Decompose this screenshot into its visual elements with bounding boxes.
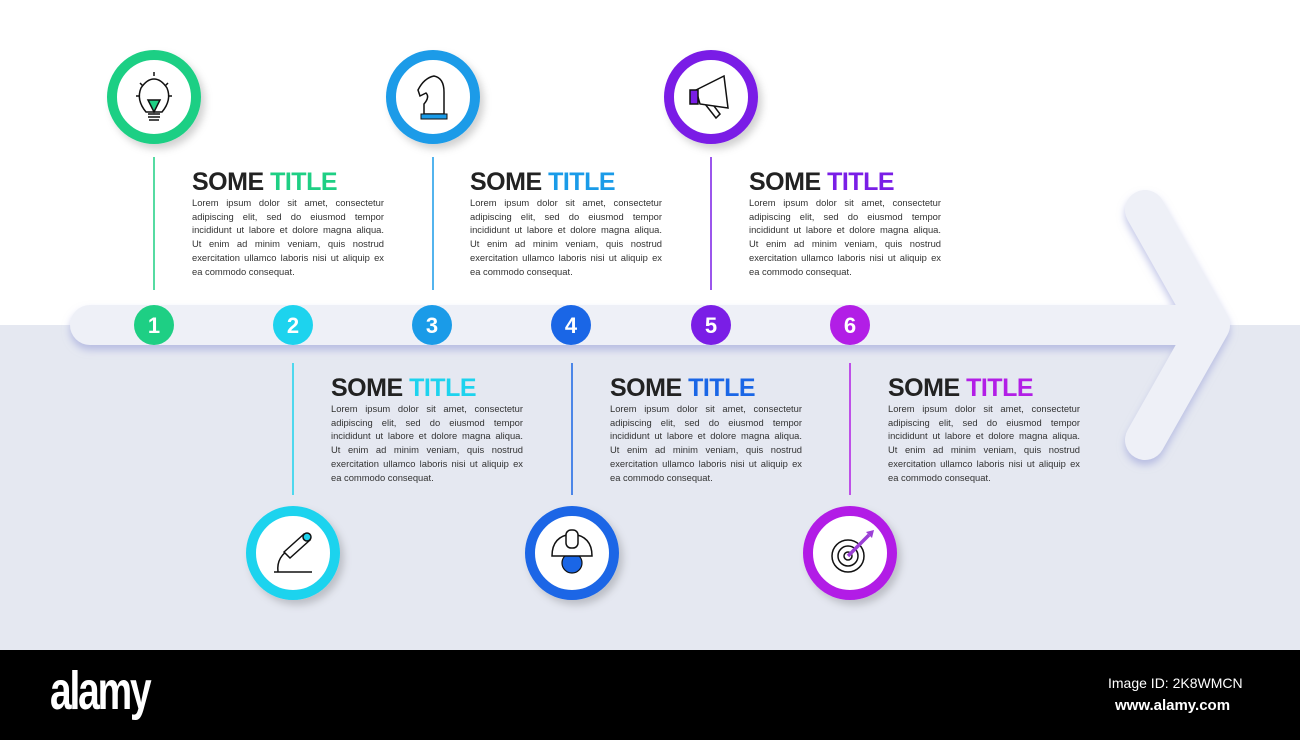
text block 1: SOME TITLE	[192, 168, 337, 196]
text block 6: exercitation ullamco laboris nisi ut aliquip ex	[888, 458, 1080, 469]
marker 4	[551, 305, 591, 345]
marker 5: 5	[705, 313, 717, 338]
marker 3	[412, 305, 452, 345]
text block 4: incididunt ut labore et dolore magna aliqua.	[610, 430, 802, 441]
text block 5: incididunt ut labore et dolore magna aliqua.	[749, 224, 941, 235]
text block 5: SOME TITLE	[749, 168, 894, 196]
text block 1: exercitation ullamco laboris nisi ut aliquip ex	[192, 252, 384, 263]
text block 3: ea commodo consequat.	[470, 266, 573, 277]
footer url: www.alamy.com	[1115, 697, 1230, 714]
icon: target	[808, 511, 892, 595]
text block 6: SOME TITLE	[888, 374, 1033, 402]
marker 3: 3	[426, 313, 438, 338]
marker 2	[273, 305, 313, 345]
text block 4	[610, 374, 802, 483]
text block 6: Ut enim ad minim veniam, quis nostrud	[888, 444, 1080, 455]
text block 2: exercitation ullamco laboris nisi ut aliquip ex	[331, 458, 523, 469]
marker 2: 2	[287, 313, 299, 338]
text block 4: adipiscing elit, sed do eiusmod tempor	[610, 417, 802, 428]
text block 1	[192, 168, 384, 277]
text block 6: incididunt ut labore et dolore magna aliqua.	[888, 430, 1080, 441]
text block 3: Ut enim ad minim veniam, quis nostrud	[470, 238, 662, 249]
text block 1: Lorem ipsum dolor sit amet, consectetur	[192, 197, 384, 208]
connector lines	[154, 157, 850, 495]
footer logo: alamy	[50, 661, 149, 721]
text block 1: adipiscing elit, sed do eiusmod tempor	[192, 211, 384, 222]
text block 5: ea commodo consequat.	[749, 266, 852, 277]
marker 1: 1	[148, 313, 160, 338]
footer bar	[0, 650, 1300, 740]
text block 2: ea commodo consequat.	[331, 472, 434, 483]
footer image id: Image ID: 2K8WMCN	[1108, 675, 1243, 691]
text block 6: Lorem ipsum dolor sit amet, consectetur	[888, 403, 1080, 414]
text block 2: Lorem ipsum dolor sit amet, consectetur	[331, 403, 523, 414]
text block 5: exercitation ullamco laboris nisi ut aliquip ex	[749, 252, 941, 263]
text block 2: Ut enim ad minim veniam, quis nostrud	[331, 444, 523, 455]
text block 2: incididunt ut labore et dolore magna aliqua.	[331, 430, 523, 441]
text block 5	[749, 168, 941, 277]
icon: helmet gear	[530, 511, 614, 595]
text block 4: Ut enim ad minim veniam, quis nostrud	[610, 444, 802, 455]
text block 3: exercitation ullamco laboris nisi ut aliquip ex	[470, 252, 662, 263]
text block 5: Lorem ipsum dolor sit amet, consectetur	[749, 197, 941, 208]
text block 1: incididunt ut labore et dolore magna aliqua.	[192, 224, 384, 235]
icon: chess knight	[391, 55, 475, 139]
text block 2: adipiscing elit, sed do eiusmod tempor	[331, 417, 523, 428]
text block 6	[888, 374, 1080, 483]
text block 6: adipiscing elit, sed do eiusmod tempor	[888, 417, 1080, 428]
text block 3: incididunt ut labore et dolore magna aliqua.	[470, 224, 662, 235]
text block 1: Ut enim ad minim veniam, quis nostrud	[192, 238, 384, 249]
icon: lightbulb	[112, 55, 196, 139]
text block 4: exercitation ullamco laboris nisi ut aliquip ex	[610, 458, 802, 469]
text block 4: Lorem ipsum dolor sit amet, consectetur	[610, 403, 802, 414]
text block 5: adipiscing elit, sed do eiusmod tempor	[749, 211, 941, 222]
marker 5	[691, 305, 731, 345]
icon: megaphone	[669, 55, 753, 139]
text block 3: Lorem ipsum dolor sit amet, consectetur	[470, 197, 662, 208]
text block 6: ea commodo consequat.	[888, 472, 991, 483]
icon: microscope	[251, 511, 335, 595]
text block 2: SOME TITLE	[331, 374, 476, 402]
marker 1	[134, 305, 174, 345]
text block 3	[470, 168, 662, 277]
marker 6: 6	[844, 313, 856, 338]
text block 2	[331, 374, 523, 483]
marker 6	[830, 305, 870, 345]
text block 3: adipiscing elit, sed do eiusmod tempor	[470, 211, 662, 222]
text block 1: ea commodo consequat.	[192, 266, 295, 277]
text block 3: SOME TITLE	[470, 168, 615, 196]
text block 4: ea commodo consequat.	[610, 472, 713, 483]
background bottom band	[0, 325, 1300, 650]
text block 5: Ut enim ad minim veniam, quis nostrud	[749, 238, 941, 249]
text block 4: SOME TITLE	[610, 374, 755, 402]
marker 4: 4	[565, 313, 578, 338]
